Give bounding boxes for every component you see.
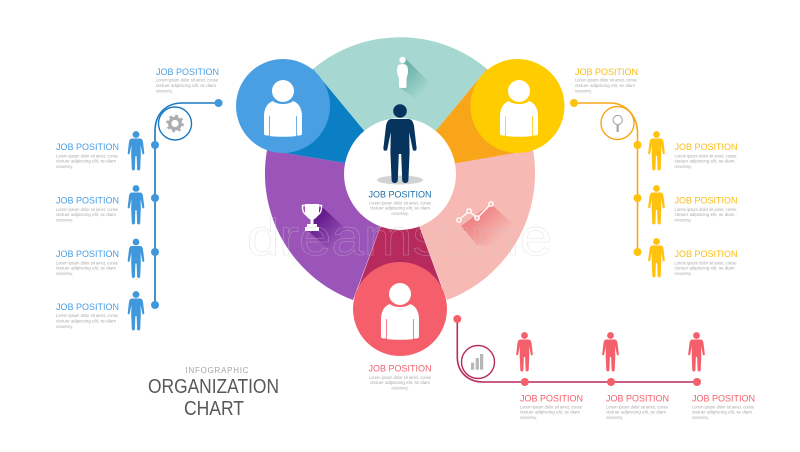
title: INFOGRAPHIC (186, 366, 249, 375)
wedge: orange (400, 69, 515, 174)
title: ORGANIZATION (148, 376, 279, 398)
label: 3: ctetuer adipiscing elit, se diam (674, 266, 735, 270)
blue branch (56, 67, 222, 330)
central person (377, 104, 423, 184)
watermark: dreamstime (247, 209, 552, 267)
label: 4: ctetuer adipiscing elit, se diam (56, 318, 117, 324)
label: 2: JOB POSITION (56, 196, 119, 206)
person icons (516, 332, 705, 372)
label: 2: nonummy. (56, 218, 73, 222)
label: 2: Lorem ipsum dolor sit amet, conse (606, 404, 669, 410)
label: 3: JOB POSITION (692, 394, 755, 404)
connector line (457, 319, 697, 382)
label: 1: nonummy. (56, 164, 73, 169)
connector dots (570, 99, 642, 256)
label: 2: nonummy. (606, 415, 623, 420)
label: 2: JOB POSITION (674, 196, 738, 206)
label: 1: JOB POSITION (520, 394, 583, 404)
node: red circle (353, 262, 447, 356)
label: 4: nonummy. (56, 324, 73, 329)
label: 2: nonummy. (674, 218, 692, 222)
node: blue circle (236, 59, 330, 153)
label: centre node: ctetuer adipiscing elit, se diam (370, 380, 431, 385)
label: top: Lorem ipsum dolor sit amet, conse (575, 78, 638, 82)
label: 2: ctetuer adipiscing elit, se diam (606, 410, 667, 414)
label: 1 (674, 142, 738, 169)
connector line (574, 103, 638, 252)
label: 4: JOB POSITION (56, 302, 119, 312)
label: 3 (56, 249, 119, 276)
label: top: ctetuer adipiscing elit, se diam (156, 83, 217, 88)
title: CHART (184, 398, 244, 420)
central label: ctetuer adipiscing elit, se diam (370, 206, 431, 210)
central label: JOB POSITION (368, 190, 432, 200)
person icons (128, 131, 144, 330)
label: 2: JOB POSITION (606, 394, 669, 404)
label: 4: Lorem ipsum dolor sit amet, conse (56, 313, 119, 318)
label: 1: JOB POSITION (674, 142, 738, 152)
red branch (368, 315, 755, 420)
label: top: JOB POSITION (156, 67, 219, 77)
connector dots (151, 99, 222, 309)
segment: teal (313, 37, 487, 174)
label: 2: ctetuer adipiscing elit, se diam (674, 212, 735, 217)
label: 1: nonummy. (520, 415, 537, 420)
person icons (648, 131, 665, 278)
central label: nonummy. (392, 211, 409, 216)
central label: Lorem ipsum dolor sit amet, conse (369, 200, 432, 206)
label: 2 (674, 196, 738, 222)
label: 3: JOB POSITION (674, 249, 738, 259)
label: 3: ctetuer adipiscing elit, se diam (692, 410, 753, 414)
label: top (575, 67, 638, 94)
panel: central pie diagram (236, 37, 564, 356)
label: 3: Lorem ipsum dolor sit amet, conse (692, 404, 755, 410)
label: centre node (368, 364, 432, 390)
label: centre node: Lorem ipsum dolor sit amet, conse (369, 375, 432, 380)
icon: trophy with shadow (302, 204, 346, 251)
label: 2: ctetuer adipiscing elit, se diam (56, 212, 117, 217)
wedge: dark blue (285, 69, 400, 174)
label: 2 (56, 196, 119, 222)
icon: gear in ring (158, 107, 192, 140)
label: 2 (606, 394, 669, 420)
label: 3 (674, 249, 738, 276)
label: 2: Lorem ipsum dolor sit amet, conse (674, 207, 737, 212)
wedge: dark red (358, 174, 442, 288)
icon: magnifier in ring (601, 106, 634, 140)
label: 1: ctetuer adipiscing elit, se diam (56, 158, 117, 164)
label: top: JOB POSITION (575, 67, 638, 77)
label: top: ctetuer adipiscing elit, se diam (575, 83, 636, 88)
label: 1 (520, 394, 583, 420)
label: 1: Lorem ipsum dolor sit amet, conse (56, 154, 119, 158)
connector line (155, 103, 218, 305)
segment: purple (265, 150, 400, 300)
icon: small white person with shadow (397, 57, 428, 101)
label: 1: Lorem ipsum dolor sit amet, conse (520, 404, 583, 410)
central white circle (344, 118, 456, 230)
icon: bars in ring (462, 346, 494, 378)
label: top: nonummy. (156, 88, 173, 94)
label: 3: JOB POSITION (56, 249, 119, 259)
label: 3: nonummy. (692, 415, 709, 420)
label: 3 (692, 394, 755, 420)
label: 3: Lorem ipsum dolor sit amet, conse (674, 260, 737, 266)
label: centre node: JOB POSITION (368, 364, 432, 374)
label: centre node: nonummy. (392, 386, 409, 390)
title (148, 366, 279, 420)
node: yellow circle (470, 59, 564, 153)
label: 1: Lorem ipsum dolor sit amet, conse (674, 154, 737, 158)
connector dots (453, 315, 701, 386)
label: 3: Lorem ipsum dolor sit amet, conse (56, 260, 119, 266)
label: 3: nonummy. (56, 271, 73, 276)
label: 1: ctetuer adipiscing elit, se diam (674, 158, 735, 164)
label: 4 (56, 302, 119, 329)
label: 1 (56, 142, 119, 169)
label: 1: ctetuer adipiscing elit, se diam (520, 410, 581, 414)
label: top (156, 67, 219, 94)
label: 3: ctetuer adipiscing elit, se diam (56, 266, 117, 270)
central label (368, 190, 432, 216)
label: top: nonummy. (575, 88, 592, 94)
segment: pink (400, 150, 535, 300)
yellow branch (570, 67, 738, 278)
icon: line chart with shadow (457, 202, 513, 246)
label: 3: nonummy. (674, 271, 692, 276)
label: 1: JOB POSITION (56, 142, 119, 152)
label: 2: Lorem ipsum dolor sit amet, conse (56, 207, 119, 212)
label: top: Lorem ipsum dolor sit amet, conse (156, 78, 219, 82)
label: 1: nonummy. (674, 164, 692, 169)
